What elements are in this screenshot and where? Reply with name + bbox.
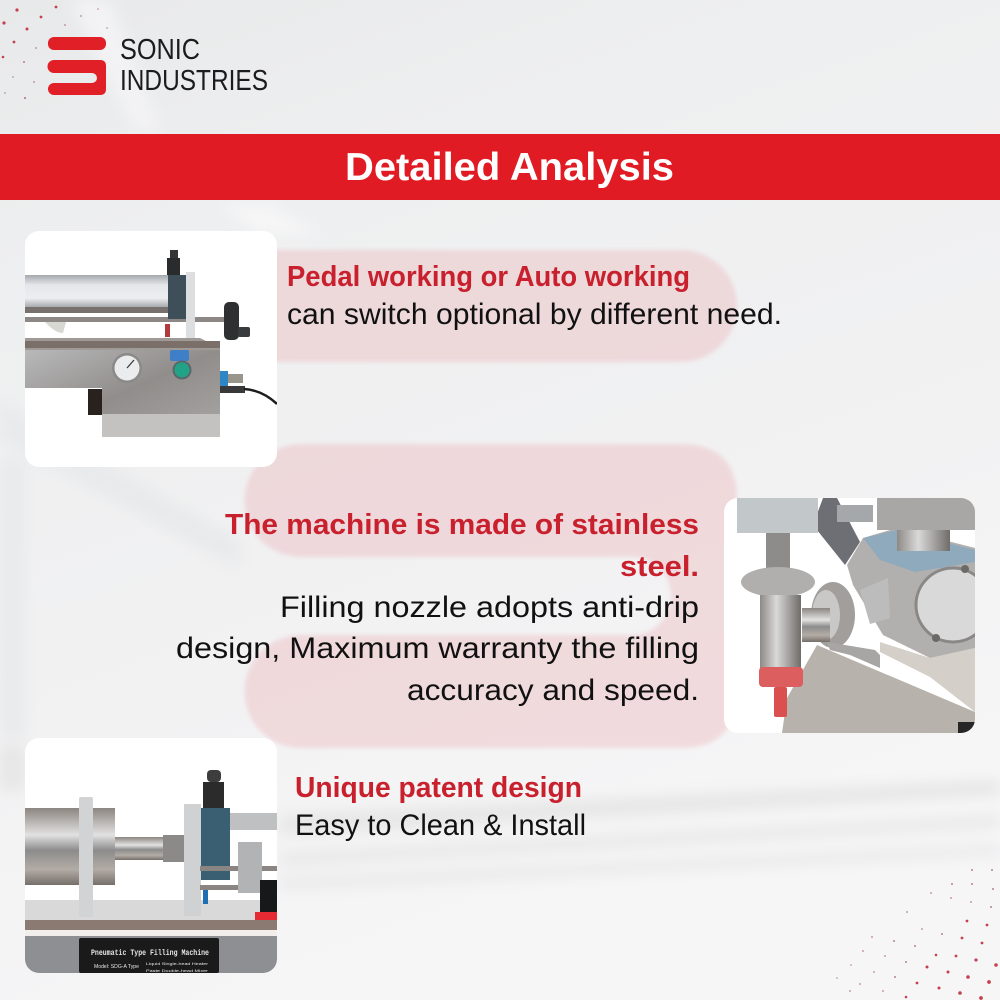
photo: machine control end xyxy=(25,231,277,467)
body text: Filling nozzle adopts anti-drip xyxy=(280,591,699,624)
heading: Unique patent design xyxy=(295,772,582,804)
logo: Sonic Industries xyxy=(48,34,268,97)
panel: pedal or auto working xyxy=(25,231,782,467)
logo wordmark xyxy=(120,34,268,97)
nameplate text xyxy=(91,948,209,973)
heading xyxy=(225,509,699,583)
body text: accuracy and speed. xyxy=(407,674,699,707)
pink highlight: first row xyxy=(265,250,737,362)
heading: steel. xyxy=(620,551,699,583)
logo wordmark: SONIC xyxy=(120,34,200,66)
photo: cylinder and nameplate xyxy=(25,738,277,973)
heading: The machine is made of stainless xyxy=(225,509,699,541)
panel: stainless steel xyxy=(176,498,990,733)
photo: filling nozzle xyxy=(724,498,990,733)
title banner xyxy=(0,134,1000,200)
logo wordmark: INDUSTRIES xyxy=(120,65,268,97)
nameplate text: Liquid Single-head Heater xyxy=(146,962,209,966)
nameplate text: Paste Double-head Mixer xyxy=(146,969,209,973)
panel: unique patent design xyxy=(25,738,586,973)
title: Detailed Analysis xyxy=(345,146,674,189)
body text xyxy=(176,591,699,707)
body text: can switch optional by different need. xyxy=(287,298,782,331)
nameplate text: Model: SDG-A Type xyxy=(94,964,139,970)
pink highlight: second row xyxy=(244,444,737,748)
nameplate text: Pneumatic Type Filling Machine xyxy=(91,948,209,958)
heading: Pedal working or Auto working xyxy=(287,261,690,293)
body text: Easy to Clean & Install xyxy=(295,809,586,842)
logo mark xyxy=(48,37,106,95)
body text: design, Maximum warranty the filling xyxy=(176,632,699,665)
